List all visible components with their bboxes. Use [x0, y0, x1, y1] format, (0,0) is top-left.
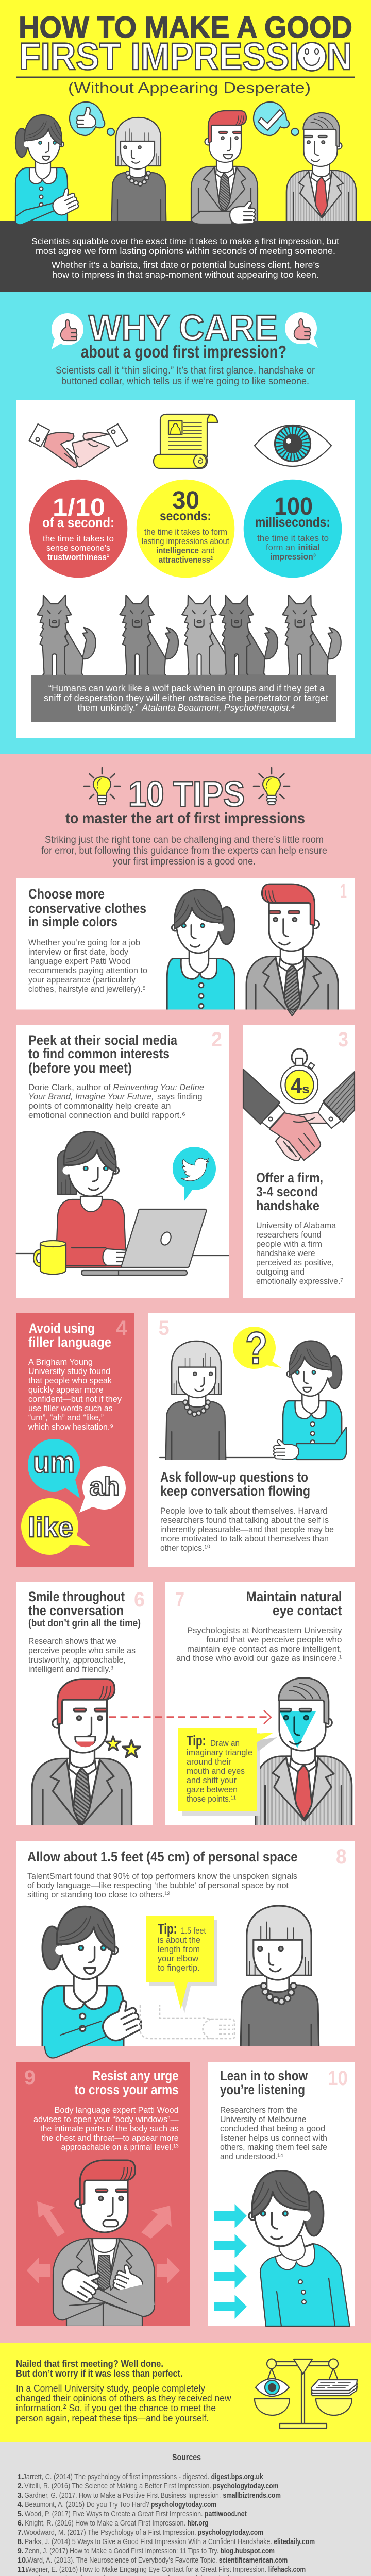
sources list: smallbiztrends.com — [223, 2491, 281, 2500]
tip body: intelligent and friendly.³ — [28, 1665, 113, 1674]
sources list: 10. — [18, 2556, 28, 2565]
sources list: 6. — [18, 2519, 24, 2528]
tip heading: Peek at their social media — [28, 1032, 178, 1048]
speech bubble: um: um — [33, 1446, 75, 1479]
stat: thirty seconds: attractiveness² — [159, 555, 213, 565]
description: buttoned collar, which tells us if we’re going to like someone. — [61, 376, 309, 387]
conclusion text: changed their opinions of others as they received new — [16, 2393, 231, 2403]
sources list — [18, 2472, 351, 2576]
tip body — [33, 2106, 179, 2152]
conclusion text: information.² So, if you get the chance to meet the — [16, 2402, 216, 2413]
intro text — [31, 236, 339, 280]
tip heading: (but don’t grin all the time) — [28, 1618, 141, 1629]
tip heading: to cross your arms — [75, 2082, 179, 2097]
sources list: elitedaily.com — [274, 2537, 315, 2546]
tip body: TalentSmart found that 90% of top performers know the unspoken signals — [27, 1872, 297, 1881]
tip heading — [28, 1320, 111, 1350]
panel: tip 1 — [16, 878, 355, 1017]
illustration: handshake with sleeves — [243, 1069, 355, 1160]
tip heading: filler language — [28, 1334, 111, 1350]
tip body: language expert Patti Wood — [28, 957, 130, 966]
tip body: people with a firm — [256, 1240, 322, 1249]
speech bubble: ah — [79, 1466, 126, 1513]
tip body: University of Melbourne — [220, 2115, 307, 2124]
panel: tip 4 — [16, 1313, 134, 1567]
person: man with red quiff — [191, 111, 258, 234]
tip body: your appearance (particularly — [28, 975, 136, 985]
tip heading: Resist any urge — [92, 2068, 179, 2083]
tip body: confident—but not if they — [28, 1395, 122, 1404]
stat: one tenth of a second: 1/10 — [53, 494, 105, 521]
intro text: most agree we form lasting opinions within seconds of meeting someone. — [36, 246, 335, 256]
tip body: researchers found that talking about the self is — [160, 1516, 329, 1525]
tip heading: (before you meet) — [28, 1060, 132, 1076]
sources list: 9. — [18, 2547, 24, 2555]
tip body — [27, 1872, 297, 1900]
tip heading: the conversation — [28, 1603, 124, 1618]
heading: ten tips with bulbs — [84, 768, 290, 814]
tip callout — [146, 1916, 217, 2013]
tip callout: length from — [158, 1945, 200, 1954]
stopwatch label: s — [302, 1082, 310, 1096]
tip number: 7 — [175, 1588, 184, 1611]
quote text — [44, 683, 328, 713]
sources list: 1. — [18, 2472, 24, 2481]
tip body: researchers found — [256, 1230, 322, 1240]
tip callout: is about the — [158, 1936, 200, 1945]
sources list: 2. — [18, 2482, 24, 2490]
tip heading: you’re listening — [220, 2082, 305, 2097]
sources list: Woodward, M. (2017) The Psychology of a First Impression. — [24, 2528, 196, 2537]
icon: eye — [255, 425, 331, 466]
stat: thirty seconds: lasting impressions about — [142, 537, 229, 546]
stat: thirty seconds: seconds: — [160, 508, 211, 523]
sources list: psychologytoday.com — [198, 2528, 263, 2537]
tip body: that people who speak — [28, 1376, 112, 1385]
quote text: “Humans can work like a wolf pack when in groups and if they get a — [48, 683, 325, 693]
stat: one hundred milliseconds: form an — [266, 543, 295, 552]
tip number: 4 — [116, 1317, 128, 1340]
sources list: Wood, P. (2017) Five Ways to Create a Great First Impression. — [25, 2510, 203, 2518]
tip callout — [178, 1728, 277, 1816]
tip body: Your Brand, Imagine Your Future, — [28, 1092, 154, 1101]
tip body: concluded that being a good — [220, 2124, 325, 2133]
illustration: four people with thought bubbles — [15, 102, 356, 239]
illustration: woman leaning in — [249, 2171, 350, 2326]
sources list: Zenn, J. (2017) How to Make a Good First Impression: 11 Tips to Try. — [25, 2547, 218, 2555]
sources list: 4. — [18, 2500, 24, 2509]
tip body: quickly appear more — [28, 1385, 104, 1395]
tip callout: gaze between — [187, 1785, 238, 1794]
section background: header — [0, 0, 371, 221]
stat: thirty seconds: and — [201, 546, 215, 555]
dark intro band — [0, 221, 371, 292]
tip body: Researchers from the — [220, 2106, 298, 2115]
icon: handshake — [29, 424, 128, 467]
stat: one tenth of a second: sense someone’s — [46, 544, 110, 553]
stopwatch label — [291, 1074, 310, 1098]
section background: ten tips — [0, 754, 371, 2343]
tip body: perceived as positive, — [256, 1258, 334, 1267]
title line two with smiley: FIRST IMPRESSION — [19, 35, 352, 78]
tip body: points of commonality help create an — [28, 1101, 171, 1111]
icon: balance scales — [255, 2359, 357, 2428]
tip heading — [220, 2068, 308, 2097]
tip callout: Tip: — [158, 1921, 177, 1937]
icon: resume scroll — [154, 414, 217, 468]
tip number: 5 — [159, 1317, 170, 1340]
icon: thumb bubble right — [285, 312, 318, 348]
tip heading — [75, 2068, 179, 2097]
description — [41, 835, 327, 867]
sources list: 5. — [18, 2510, 24, 2518]
intro text: how to impress in that snap-moment without appearing too keen. — [52, 269, 319, 280]
tip body — [28, 938, 147, 994]
panel: tip 10 — [208, 2062, 355, 2326]
sleeves and hands over band — [15, 187, 255, 225]
tip body: the intimate parts of the body such as — [40, 2124, 179, 2133]
tip callout: Tip: — [187, 1733, 206, 1749]
heading: ten tips with bulbs: 10 TIPS — [128, 774, 245, 814]
tip body — [160, 1506, 334, 1553]
tip number: 3 — [338, 1028, 348, 1051]
stat: one hundred milliseconds: initial — [298, 543, 320, 552]
quote text: them unkindly.” — [78, 703, 139, 713]
tip heading: Choose more — [28, 886, 105, 902]
illustration: conservative clothes — [166, 883, 339, 1017]
panel: tip 7 — [165, 1582, 355, 1849]
subheading: to master the art of first impressions — [65, 810, 305, 827]
stat: one tenth of a second: trustworthiness¹ — [47, 553, 109, 562]
heading: why care: WHY CARE — [89, 308, 278, 348]
conclusion text: In a Cornell University study, people completely — [16, 2383, 206, 2394]
sources list: scientificamerican.com — [219, 2556, 288, 2565]
question bubble: ? — [245, 1323, 267, 1374]
thought bubble: check mark — [254, 102, 299, 135]
icon: twitter bubble — [173, 1147, 216, 1201]
section background: why care — [0, 292, 371, 754]
tip body — [176, 1626, 342, 1663]
panel: tip 3 — [243, 1025, 355, 1298]
title line one: HOW TO MAKE A GOOD — [19, 11, 352, 44]
tip body: approachable on a primal level.¹³ — [61, 2143, 179, 2152]
tip body: other topics.¹⁰ — [160, 1544, 210, 1553]
tip number: 6 — [134, 1588, 145, 1611]
tip number: 8 — [336, 1845, 347, 1868]
sources list: Vitelli, R. (2016) The Science of Making a Better First Impression. — [24, 2482, 211, 2490]
tip heading: 3-4 second — [256, 1184, 318, 1199]
speech bubble: like — [21, 1498, 91, 1555]
sources list: pattiwood.net — [205, 2510, 247, 2518]
intro text: Whether it’s a barista, first date or potential business client, here’s — [52, 260, 319, 270]
quote text: sniff of desperation they will either ostracise the perpetrator or target — [44, 693, 328, 703]
description: Striking just the right tone can be challenging and there’s little room — [45, 835, 324, 845]
panel: why care facts — [16, 400, 355, 738]
tip body: Whether you’re going for a job — [28, 938, 140, 947]
tip heading: keep conversation flowing — [160, 1483, 310, 1499]
tip callout: to fingertip. — [158, 1963, 200, 1973]
tip body — [28, 1358, 122, 1432]
tip heading: Smile throughout — [28, 1589, 125, 1604]
tip body: others, making them feel safe — [220, 2143, 327, 2152]
description: Scientists call it “thin slicing.” It’s that first glance, handshake or — [56, 365, 315, 376]
sources list: digest.bps.org.uk — [211, 2472, 263, 2481]
tip heading: Lean in to show — [220, 2068, 308, 2083]
tip body: maintain eye contact as more intelligent, — [187, 1645, 342, 1654]
sources list: 3. — [18, 2491, 24, 2500]
description — [56, 365, 315, 387]
conclusion text: But don’t worry if it was less than perfect. — [16, 2368, 182, 2379]
stat: one hundred milliseconds: milliseconds: — [255, 514, 330, 530]
stopwatch label: 4 — [291, 1074, 302, 1098]
tip body: handshake were — [256, 1249, 315, 1258]
tip body — [256, 1221, 343, 1286]
icon: stopwatch — [281, 1049, 318, 1104]
tip heading — [256, 1170, 323, 1213]
tip callout: your elbow — [158, 1954, 198, 1963]
stat: one tenth of a second — [29, 480, 127, 578]
tip body: “um”, “ah” and “like,” — [28, 1413, 104, 1422]
tip body: more motivated to talk about themselves than — [160, 1534, 329, 1544]
tip heading: to find common interests — [28, 1046, 170, 1061]
stat: one hundred milliseconds — [244, 480, 342, 578]
speech bubble: like: like — [28, 1512, 73, 1543]
speech bubble: ah: ah — [90, 1472, 120, 1501]
tip body: emotional connection and build rapport.⁶ — [28, 1111, 185, 1120]
sources list: 11. — [18, 2565, 28, 2574]
stat: thirty seconds: intelligence — [156, 546, 199, 555]
tip body: Research shows that we — [28, 1637, 116, 1646]
tip heading: eye contact — [273, 1603, 342, 1618]
arrow: eye contact gaze — [109, 1710, 271, 1724]
tip body: Reinventing You: Define — [113, 1083, 204, 1092]
illustration: man with gaze triangle — [255, 1677, 352, 1825]
tip body: People love to talk about themselves. Harvard — [160, 1506, 327, 1516]
illustration: women at arm's length — [42, 1906, 319, 2083]
tip body: of body language—like respecting ‘the bubble’ of personal space by not — [27, 1881, 289, 1890]
icon: leaning arrows — [214, 2204, 247, 2319]
tip number: 2 — [211, 1028, 222, 1051]
sources list: Gardner, G. (2017. How to Make a Positive First Business Impression. — [24, 2491, 221, 2500]
tip body: University study found — [28, 1367, 110, 1376]
sources list: 8. — [18, 2537, 24, 2546]
tip body: Dorie Clark, author of — [28, 1083, 111, 1092]
icon: thumb bubble left — [52, 313, 83, 349]
sources list: Knight, R. (2016) How to Make a Great First Impression. — [25, 2519, 185, 2528]
stat: thirty seconds: the time it takes to form — [144, 528, 227, 537]
sources list: Ward, A. (2013). The Neuroscience of Everybody's Favorite Topic. — [27, 2556, 217, 2565]
section background: sources — [0, 2442, 371, 2576]
tip body: listener helps us connect with — [220, 2133, 327, 2143]
panel: tip 6 — [16, 1582, 153, 1825]
stat: one tenth of a second: the time it takes to — [43, 534, 114, 544]
tip body: sitting or standing too close to others.¹² — [27, 1890, 170, 1900]
conclusion text: Nailed that first meeting? Well done. — [16, 2358, 163, 2369]
person: man with pinstripe suit — [286, 113, 356, 239]
tip body: advises to open your “body windows”— — [33, 2115, 179, 2124]
sources list: Wagner, E. (2016) How to Make Engaging Eye Contact for a Great First Impression. — [26, 2565, 266, 2574]
tip body: found that we perceive people who — [206, 1635, 342, 1645]
tip body: and those who avoid our gaze as insincere.¹ — [176, 1654, 342, 1663]
tip callout: 1.5 feet — [181, 1926, 206, 1936]
sources heading: Sources — [172, 2452, 201, 2462]
tip body — [220, 2106, 327, 2161]
thought bubble: thumbs up — [70, 102, 114, 135]
stat: thirty seconds — [137, 480, 234, 578]
tip body: clothes, hairstyle and jewellery).⁵ — [28, 985, 146, 994]
tip body: interview or first date, body — [28, 947, 129, 957]
tip body: outgoing and — [256, 1267, 305, 1277]
person: woman with bun — [15, 115, 68, 233]
tip body: University of Alabama — [256, 1221, 336, 1230]
tip body — [28, 1083, 204, 1120]
illustration: woman at laptop — [16, 1132, 229, 1275]
tip heading: handshake — [256, 1198, 319, 1213]
stat: one hundred milliseconds: the time it takes to — [257, 534, 329, 543]
person: woman with bob — [111, 117, 166, 239]
tip body: inherently pleasurable—and that people may be — [160, 1525, 334, 1534]
tip heading: in simple colors — [28, 914, 117, 929]
panel: tip 5 — [148, 1313, 355, 1567]
tip body: trustworthy, approachable, — [28, 1655, 126, 1665]
description: your first impression is a good one. — [113, 856, 256, 867]
tip callout: mouth and eyes — [187, 1767, 245, 1776]
panel: tip 8 — [16, 1841, 355, 2059]
sources list: Parks, J. (2014) 5 Ways to Give a Good First Impression With a Confident Handshake. — [25, 2537, 272, 2546]
tip body: use filler words such as — [28, 1404, 112, 1413]
quote text: Atalanta Beaumont, Psychotherapist.⁴ — [142, 703, 295, 713]
tip body: which show hesitation.⁹ — [28, 1422, 113, 1432]
description: for error, but following this guidance from the experts can help ensure — [41, 845, 327, 856]
tip body: perceive people who smile as — [28, 1646, 136, 1655]
stat: one hundred milliseconds: impression³ — [270, 552, 316, 562]
sources list: 7. — [18, 2528, 24, 2537]
tip heading: conservative clothes — [28, 901, 146, 916]
tip body: emotionally expressive.⁷ — [256, 1277, 343, 1286]
tip heading: Allow about 1.5 feet (45 cm) of personal space — [27, 1849, 298, 1865]
tip heading — [28, 1589, 141, 1629]
sources list: blog.hubspot.com — [221, 2547, 275, 2555]
tip heading: Maintain natural — [246, 1589, 342, 1604]
illustration: wolf pack — [37, 595, 341, 675]
tip callout: around their — [187, 1757, 231, 1767]
section background: conclusion — [0, 2343, 371, 2442]
divider rule — [16, 76, 355, 78]
tip body: A Brigham Young — [28, 1358, 93, 1367]
tip body: the chest and throat—to appear more — [42, 2133, 179, 2143]
tip heading: Avoid using — [29, 1320, 95, 1336]
stat: one tenth of a second: of a second: — [42, 515, 114, 530]
question bubble — [233, 1323, 281, 1374]
speech bubble: um — [28, 1439, 80, 1498]
tip heading — [246, 1589, 342, 1618]
tip callout: imaginary triangle — [187, 1748, 252, 1757]
tip number: 9 — [24, 2066, 36, 2089]
illustration: smiling man — [31, 1678, 141, 1825]
illustration: man with crossed arms — [53, 2160, 155, 2326]
tip heading — [28, 1032, 178, 1076]
sources list: psychologytoday.com — [151, 2500, 216, 2509]
sources list: lifehack.com — [268, 2565, 306, 2574]
tip heading — [28, 886, 146, 929]
tip number: 1 — [340, 880, 347, 903]
sources list: Jarrett, C. (2014) The psychology of first impressions - digested. — [23, 2472, 209, 2481]
stat: one hundred milliseconds: 100 — [274, 493, 313, 520]
tip callout: those points.¹¹ — [187, 1794, 236, 1804]
stat: thirty seconds: 30 — [172, 487, 199, 514]
tip heading: Offer a firm, — [256, 1170, 323, 1185]
sources list: hbr.org — [188, 2519, 208, 2528]
tip body: Psychologists at Northeastern University — [187, 1626, 342, 1635]
icon: radiating arrows — [27, 2201, 180, 2283]
tip heading: Ask follow-up questions to — [160, 1469, 308, 1485]
conclusion text: person again, repeat these tips—and be yourself. — [16, 2413, 209, 2424]
tip body: Body language expert Patti Wood — [55, 2106, 179, 2115]
tip number: 10 — [328, 2067, 348, 2090]
subtitle: (Without Appearing Desperate) — [68, 80, 311, 96]
intro text: Scientists squabble over the exact time it takes to make a first impression, but — [31, 236, 339, 246]
illustration: two women talking — [160, 1341, 346, 1475]
tip body: and understood.¹⁴ — [220, 2152, 283, 2161]
sources list: psychologytoday.com — [213, 2482, 278, 2490]
quote panel — [31, 675, 336, 722]
panel: tip 9 — [16, 2062, 190, 2326]
tip heading — [160, 1469, 310, 1499]
conclusion text — [16, 2358, 231, 2424]
subheading: about a good first impression? — [81, 342, 286, 361]
panel: tip 2 — [16, 1025, 229, 1298]
tip body: says finding — [157, 1092, 203, 1101]
tip body: recommends paying attention to — [28, 966, 147, 975]
tip body — [28, 1637, 136, 1674]
tip callout: and shift your — [187, 1776, 237, 1785]
sources list: Beaumont, A. (2015) Do you Try Too Hard? — [25, 2500, 149, 2509]
tip callout: Draw an — [210, 1739, 240, 1748]
